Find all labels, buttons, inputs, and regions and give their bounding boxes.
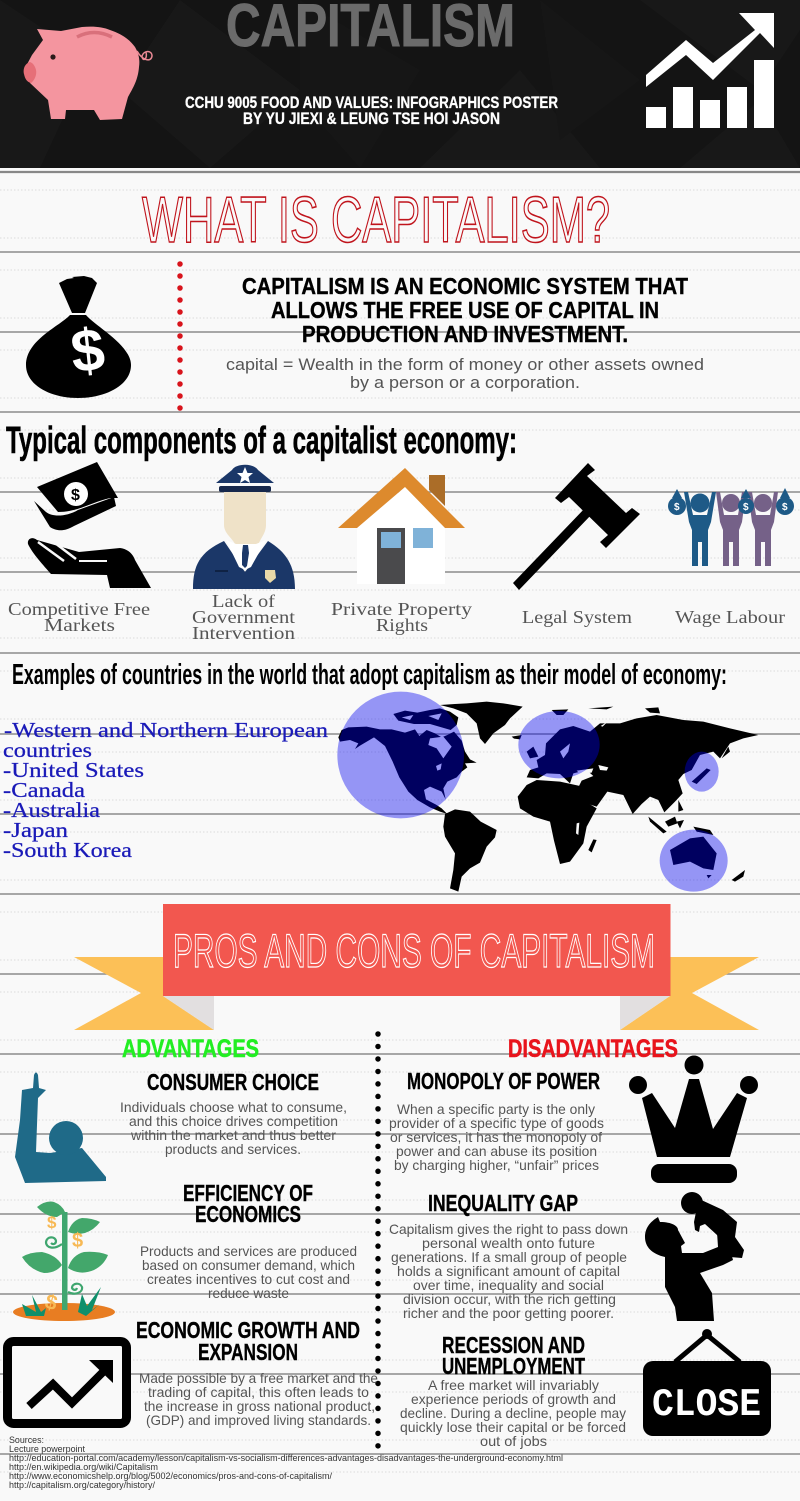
- advantage: efficiency of economics: Products and services are produced: [140, 1243, 357, 1259]
- disadvantage: monopoly of power: power and can abuse its position: [396, 1143, 597, 1159]
- icon: workers with money bags: $: [782, 502, 788, 513]
- advantage: economic growth and expansion: [136, 1317, 378, 1428]
- list: capitalist countries: -United States: [3, 758, 144, 782]
- advantage: efficiency of economics: reduce waste: [208, 1285, 289, 1301]
- text block: capital meaning: capital = Wealth in the form of money or other assets owned: [226, 355, 704, 374]
- sources: Sources:: [9, 1435, 44, 1446]
- disadvantage: monopoly of power: When a specific party is the only: [397, 1101, 595, 1117]
- advantage: economic growth and expansion: Made possible by a free market and the: [139, 1370, 378, 1386]
- heading: typical components: Typical components of a capitalist economy:: [6, 420, 517, 462]
- list: capitalist countries: -Western and Northern European: [4, 718, 329, 742]
- inland water: [402, 713, 617, 835]
- icon: police officer: [193, 465, 295, 589]
- text block: definition: PRODUCTION AND INVESTMENT.: [302, 321, 628, 347]
- text block: definition: CAPITALISM IS AN ECONOMIC SYSTEM THAT: [242, 273, 688, 299]
- continents: [338, 702, 758, 892]
- list: capitalist countries: countries: [3, 738, 92, 762]
- icon: gavel: [513, 463, 640, 590]
- component: lack of government intervention: [192, 465, 295, 643]
- label: Legal System: [522, 607, 632, 627]
- disadvantage: inequality gap: Capitalism gives the right to pass down: [389, 1221, 628, 1237]
- icon: money bag: [26, 276, 131, 398]
- advantage: economic growth and expansion: EXPANSION: [198, 1339, 298, 1365]
- icon: workers with money bags: $: [674, 502, 680, 513]
- text block: capital meaning: by a person or a corporation.: [350, 373, 580, 392]
- subtitle: CCHU 9005 FOOD AND VALUES: INFOGRAPHICS POSTER: [185, 94, 558, 112]
- label: [331, 599, 472, 635]
- heading: advantages: ADVANTAGES: [122, 1035, 259, 1063]
- component: wage labour: [668, 488, 794, 627]
- heading: disadvantages: DISADVANTAGES: [508, 1035, 678, 1063]
- advantage: economic growth and expansion: trading of capital, this often leads to: [148, 1384, 369, 1400]
- advantage: efficiency of economics: creates incentives to cut cost and: [147, 1271, 350, 1287]
- disadvantage: recession and unemployment: RECESSION AND: [442, 1332, 585, 1358]
- advantage: consumer choice: Individuals choose what to consume,: [120, 1099, 347, 1115]
- panel: header: [0, 0, 800, 168]
- subtitle: [185, 94, 558, 128]
- advantage: consumer choice: CONSUMER CHOICE: [147, 1069, 319, 1095]
- icon: rising chart: [646, 13, 774, 128]
- icon: raised finger: [15, 1072, 106, 1183]
- text block: definition: ALLOWS THE FREE USE OF CAPITAL IN: [271, 297, 659, 323]
- advantage: economic growth and expansion: ECONOMIC GROWTH AND: [136, 1317, 360, 1343]
- sources: Lecture powerpoint: [9, 1444, 85, 1455]
- label: Rights: [376, 615, 428, 635]
- icon: money plant: $: [42, 1290, 60, 1315]
- disadvantage: inequality gap: [389, 1190, 628, 1321]
- disadvantage: inequality gap: personal wealth onto future: [422, 1235, 595, 1251]
- icon: money plant: $: [47, 1213, 57, 1232]
- sources: http://education-portal.com/academy/lesson/capitalism-vs-socialism-differences-advantages-disadvantages-the-underground-economy.html: [9, 1453, 563, 1464]
- highlight: Australia: [660, 830, 728, 892]
- icon: money in hand: [28, 462, 151, 588]
- disadvantage: recession and unemployment: A free market will invariably: [428, 1377, 599, 1393]
- icon: money plant: [13, 1202, 115, 1321]
- label: Lack of: [212, 591, 275, 611]
- icon: workers with money bags: [668, 488, 794, 566]
- advantage: consumer choice: and this choice drives competition: [129, 1113, 338, 1129]
- disadvantage: recession and unemployment: UNEMPLOYMENT: [442, 1353, 585, 1379]
- icon: crown: [629, 1056, 758, 1183]
- advantage: economic growth and expansion: the increase in gross national product,: [144, 1398, 375, 1414]
- advantage: consumer choice: products and services.: [165, 1141, 301, 1157]
- advantage: economic growth and expansion: (GDP) and improved living standards.: [146, 1412, 371, 1428]
- disadvantage: inequality gap: INEQUALITY GAP: [428, 1190, 578, 1216]
- disadvantage: monopoly of power: or services, it has the monopoly of: [390, 1129, 602, 1145]
- advantage: efficiency of economics: based on consumer demand, which: [142, 1257, 355, 1273]
- icon: close sign: [643, 1329, 771, 1436]
- icon: money plant: $: [72, 1230, 83, 1252]
- sources: http://capitalism.org/category/history/: [9, 1480, 155, 1491]
- advantage: efficiency of economics: [140, 1180, 357, 1301]
- sources: http://www.economicshelp.org/blog/5002/economics/pros-and-cons-of-capitalism/: [9, 1471, 332, 1482]
- advantage: consumer choice: [120, 1069, 347, 1157]
- disadvantage: recession and unemployment: out of jobs: [480, 1433, 547, 1449]
- label: [8, 599, 150, 635]
- label: [192, 591, 295, 643]
- component: competitive free markets: [8, 462, 151, 635]
- highlight: North America: [337, 692, 464, 818]
- label: Wage Labour: [675, 607, 785, 627]
- icon: parent lifting child: [645, 1192, 744, 1321]
- disadvantage: inequality gap: holds a significant amount of capital: [397, 1263, 620, 1279]
- icon: growth chart in frame: [8, 1342, 126, 1424]
- chart: world map with highlighted regions: [337, 692, 758, 892]
- icon: money bag: $: [68, 315, 108, 386]
- banner: pros and cons: [74, 904, 759, 1030]
- disadvantage: inequality gap: division occur, with the rich getting: [403, 1291, 616, 1307]
- disadvantage: monopoly of power: provider of a specific type of goods: [389, 1115, 604, 1131]
- advantage: efficiency of economics: EFFICIENCY OF: [183, 1180, 313, 1206]
- list: capitalist countries: -Australia: [3, 798, 101, 822]
- disadvantage: inequality gap: richer and the poor getting poorer.: [403, 1305, 614, 1321]
- label: Competitive Free: [8, 599, 150, 619]
- advantage: consumer choice: within the market and thus better: [130, 1127, 336, 1143]
- disadvantage: monopoly of power: [389, 1068, 604, 1173]
- disadvantage: monopoly of power: by charging higher, “unfair” prices: [394, 1157, 599, 1173]
- text block: capital meaning: [226, 355, 704, 392]
- sources: [9, 1435, 563, 1491]
- text block: definition: [242, 273, 688, 347]
- list: capitalist countries: [3, 718, 329, 862]
- list: capitalist countries: -Japan: [3, 818, 69, 842]
- component: legal system: [513, 463, 640, 627]
- disadvantage: inequality gap: over time, inequality and social: [413, 1277, 604, 1293]
- divider: black dots: [375, 1034, 381, 1448]
- label: Government: [192, 607, 295, 627]
- icon: piggy bank: [24, 27, 152, 120]
- label: Markets: [44, 615, 115, 635]
- list: capitalist countries: -South Korea: [3, 838, 133, 862]
- list: capitalist countries: -Canada: [3, 778, 86, 802]
- disadvantage: monopoly of power: MONOPOLY OF POWER: [407, 1068, 600, 1094]
- icon: workers with money bags: $: [743, 502, 749, 513]
- divider: red dots: [177, 264, 183, 410]
- icon: close sign: CLOSE: [652, 1383, 761, 1427]
- label: Private Property: [331, 599, 472, 619]
- component: private property rights: [331, 468, 472, 635]
- disadvantage: inequality gap: generations. If a small group of people: [391, 1249, 627, 1265]
- disadvantage: recession and unemployment: quickly lose their capital or be forced: [400, 1419, 626, 1435]
- ribbon tails: [74, 957, 759, 1030]
- icon: money in hand: $: [71, 487, 80, 504]
- subtitle: BY YU JIEXI & LEUNG TSE HOI JASON: [243, 110, 500, 128]
- icon: house: [338, 468, 465, 584]
- highlight: Japan and Korea: [685, 752, 719, 792]
- disadvantage: recession and unemployment: [400, 1332, 626, 1449]
- highlight: Europe: [518, 711, 600, 778]
- label: Intervention: [192, 623, 295, 643]
- disadvantage: recession and unemployment: decline. During a decline, people may: [400, 1405, 626, 1421]
- sources: http://en.wikipedia.org/wiki/Capitalism: [9, 1462, 158, 1473]
- advantage: efficiency of economics: ECONOMICS: [195, 1201, 301, 1227]
- disadvantage: recession and unemployment: experience periods of growth and: [411, 1391, 616, 1407]
